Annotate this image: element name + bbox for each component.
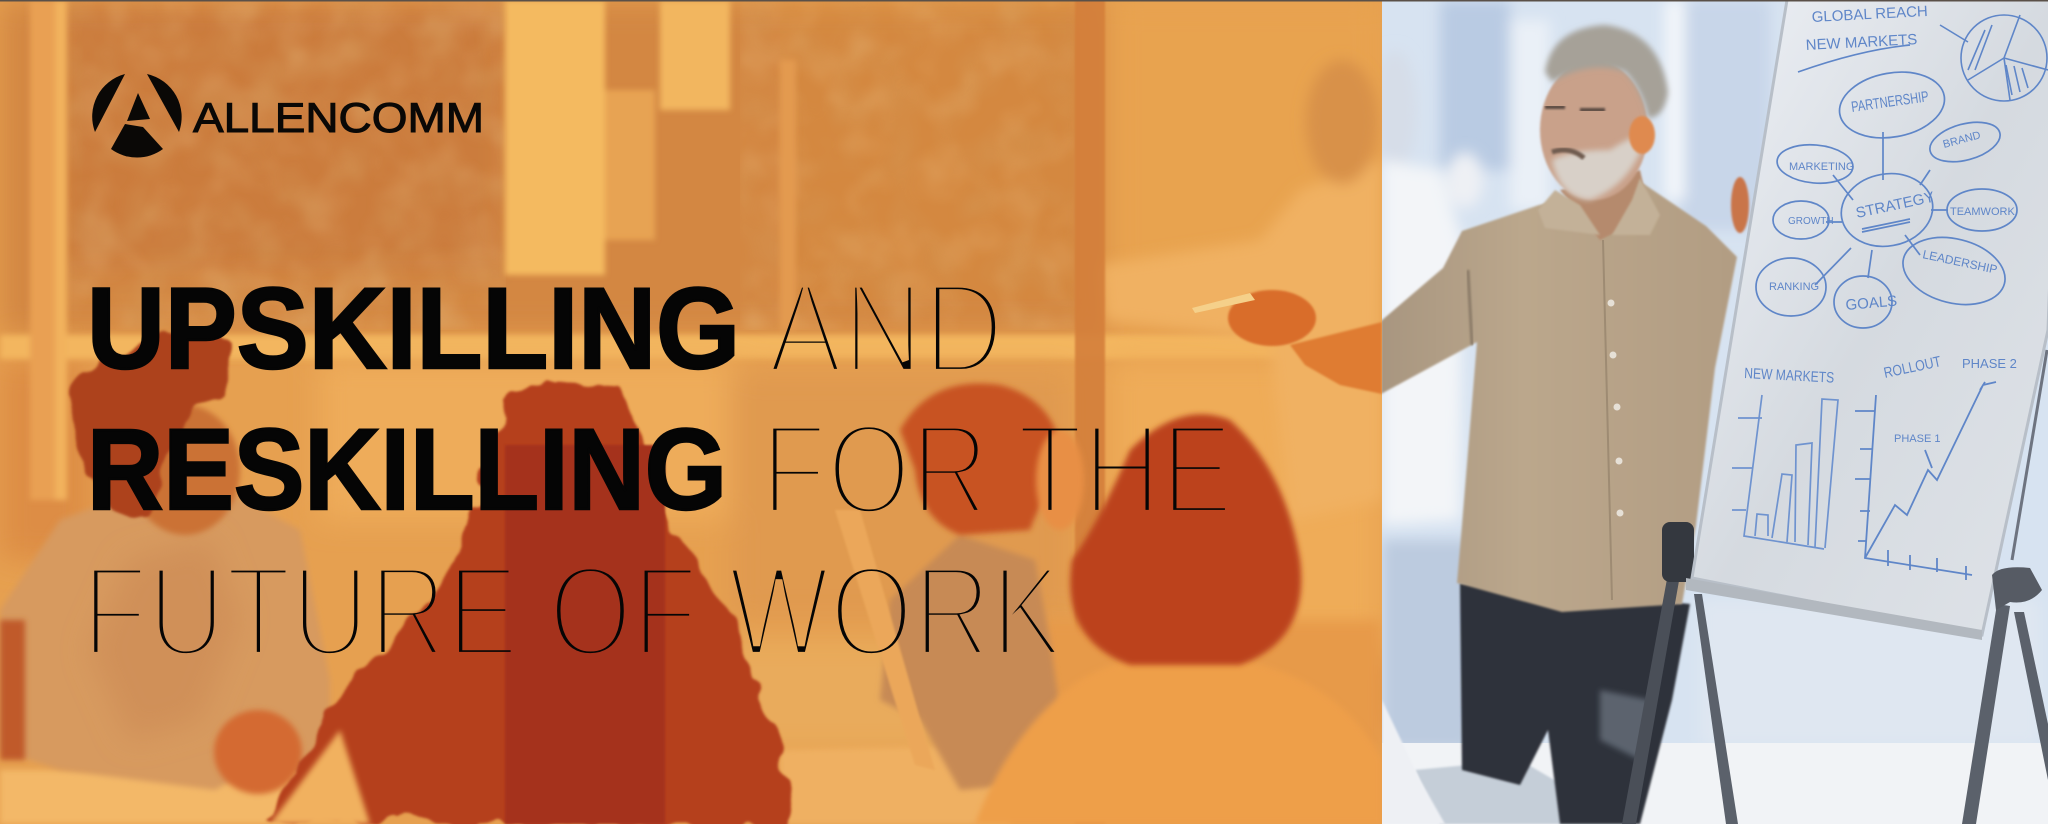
background: room mid tones [320, 360, 1382, 750]
flipchart notes: PHASE 1 [1894, 433, 1940, 445]
shirt placket and buttons [1603, 240, 1624, 600]
window backdrop [1382, 2, 1769, 743]
bold title words: reskilling: RESKILLING [87, 406, 727, 534]
person: middle woman with long hair [270, 379, 790, 824]
sweater [976, 696, 1106, 824]
mind map [1756, 45, 2017, 328]
head [1540, 25, 1668, 200]
front white shape [1382, 700, 1445, 824]
table [1416, 764, 1622, 824]
board [1692, 0, 2048, 635]
board tray [1686, 578, 1982, 640]
flipchart notes: GOALS [1845, 293, 1898, 314]
shirt edge [270, 730, 370, 824]
thin title words: FOR THE [761, 396, 1233, 542]
face [1036, 430, 1084, 530]
flipchart notes: MARKETING [1789, 161, 1854, 173]
flipchart notes: PHASE 2 [1962, 356, 2017, 371]
background: building and bright window frames [0, 0, 1382, 500]
flipchart notes: NEW MARKETS [1805, 31, 1918, 54]
person: left man [0, 332, 330, 794]
hair [1545, 25, 1668, 118]
flipchart notes: NEW MARKETS [1744, 365, 1835, 387]
neck [1560, 170, 1650, 240]
person: right woman [976, 410, 1305, 824]
presenter hand with marker [1192, 290, 1382, 394]
thin title words [82, 255, 1233, 684]
hair [900, 383, 1065, 535]
trousers [1460, 583, 1690, 824]
pillar [1074, 2, 1106, 622]
left man face [146, 404, 242, 537]
left man hair [70, 332, 231, 520]
background figure [1373, 50, 1483, 525]
flipchart notes: GROWTH [1788, 216, 1834, 227]
hair [1070, 414, 1301, 665]
background: foliage mottling [66, 0, 1075, 330]
face [1540, 60, 1648, 200]
easel hub [1992, 567, 2042, 610]
flipchart [1686, 0, 2048, 640]
pillar lower overlay on right woman region [1062, 620, 1380, 725]
hand on flipchart [1731, 177, 1749, 233]
hair body [270, 379, 790, 824]
easel legs [1622, 530, 2048, 824]
flipchart notes: TEAMWORK [1950, 206, 2015, 218]
body [880, 535, 1070, 790]
left man hands [214, 710, 302, 794]
arm crease [1468, 270, 1472, 345]
rollout line chart sketch [1855, 382, 1996, 580]
hand [1228, 290, 1316, 346]
title [82, 255, 1233, 684]
top edge line [0, 0, 2048, 2]
left edge dark [0, 620, 25, 760]
thin title words: AND [768, 255, 1004, 401]
table [0, 770, 300, 824]
flipchart notes: LEADERSHIP [1921, 247, 1999, 277]
bold title words: upskilling: UPSKILLING [87, 265, 740, 393]
collar [1538, 178, 1660, 235]
flipchart notes: PARTNERSHIP [1850, 88, 1930, 116]
moustache and mouth [1552, 150, 1584, 158]
photo panel: orange duotone classroom [0, 0, 1382, 824]
beard [1552, 137, 1645, 200]
photo panel: presenter at flipchart [1373, 0, 2048, 824]
bar chart sketch [1732, 395, 1838, 549]
left man shirt shading [106, 558, 224, 722]
presenter shirt [1381, 184, 1737, 612]
left man shirt [0, 490, 330, 790]
ear [1629, 116, 1655, 154]
logo wordmark: ALLENCOMM [193, 94, 484, 141]
logo [92, 74, 484, 158]
background: trees through window [0, 2, 1076, 562]
background presenter ghost [1100, 60, 1382, 520]
flipchart notes [1744, 3, 2017, 445]
eyes [1545, 107, 1605, 110]
logo icon [92, 74, 182, 158]
laptop [835, 510, 935, 770]
thin title words: FUTURE OF WORK [82, 538, 1063, 684]
board right frame [2012, 350, 2047, 560]
flipchart notes: RANKING [1769, 281, 1819, 293]
pie chart [1940, 15, 2048, 101]
sleeve [1290, 322, 1382, 394]
person: middle right woman [835, 383, 1084, 790]
flipchart notes: BRAND [1942, 129, 1982, 151]
white floor [1382, 743, 2048, 824]
trouser highlights [1600, 690, 1650, 760]
table right [780, 748, 989, 824]
easel clamp [1662, 522, 1694, 582]
flipchart notes: STRATEGY [1854, 189, 1936, 222]
marker [1192, 293, 1255, 313]
flipchart notes: ROLLOUT [1882, 353, 1943, 382]
flipchart notes: GLOBAL REACH [1811, 3, 1928, 26]
hair dark core [505, 445, 665, 824]
